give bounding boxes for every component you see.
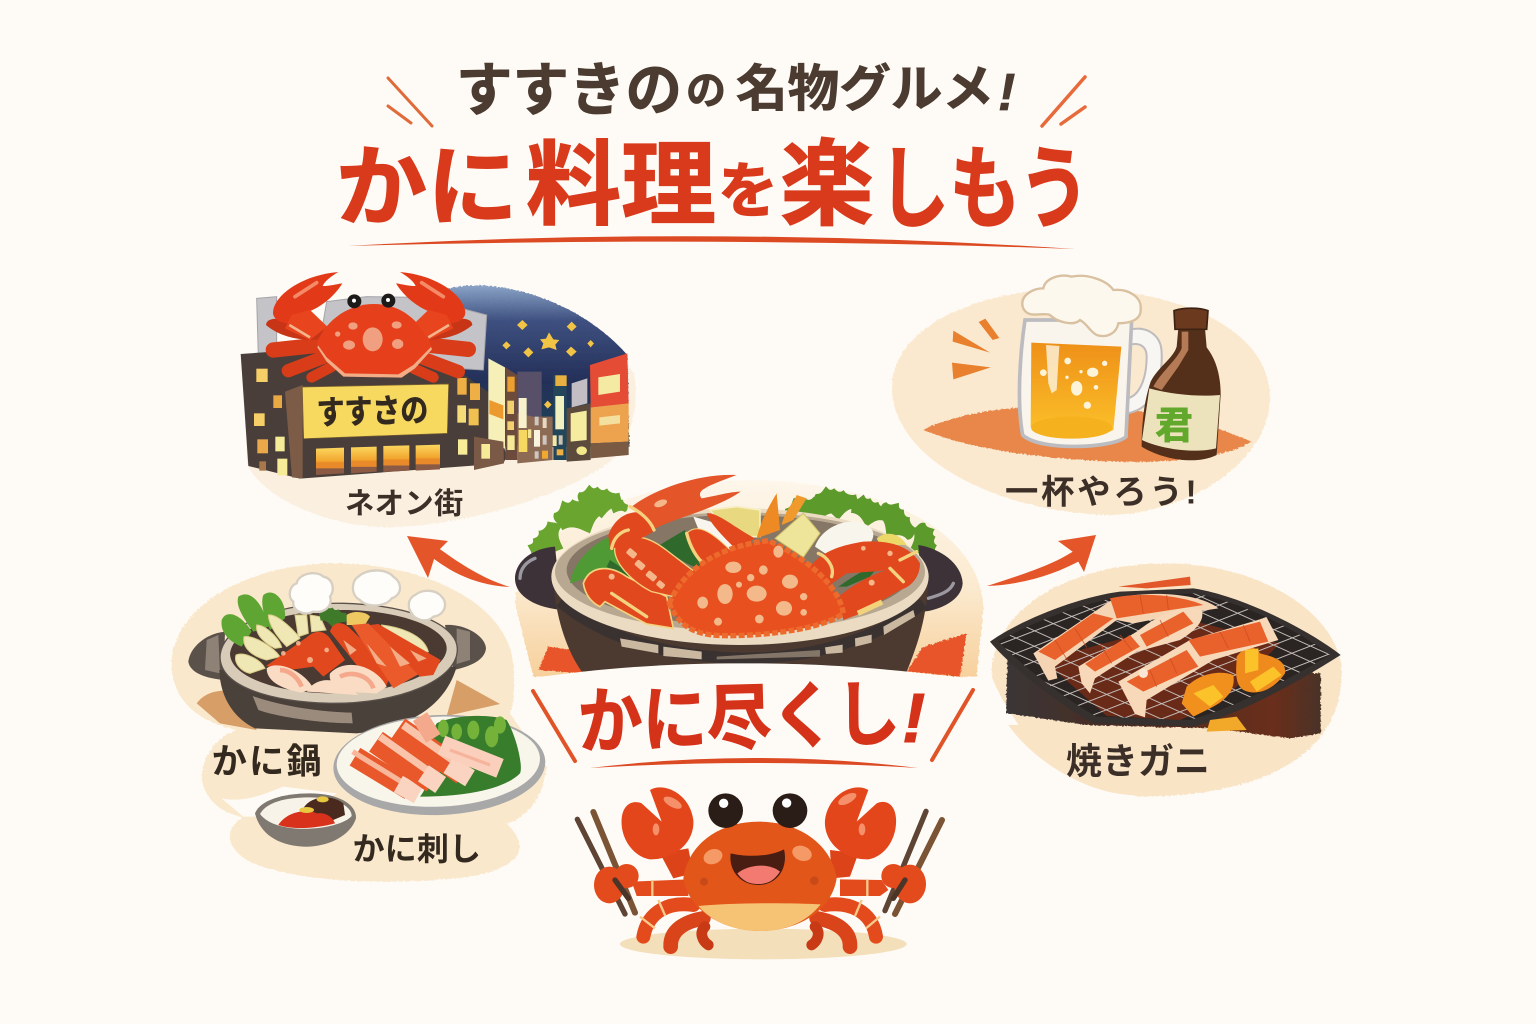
side wall: [285, 385, 303, 479]
dish inner: [260, 797, 352, 829]
mascot cheeks: [701, 843, 814, 867]
bottle body: [1142, 328, 1221, 460]
banner cut-out arc: [523, 663, 973, 687]
beer bubbles: [1040, 358, 1107, 409]
bottle: [1142, 308, 1221, 460]
pot rim: [551, 508, 929, 645]
crab spots: [335, 321, 403, 351]
sashimi plate: [332, 711, 547, 819]
night sky: [443, 285, 629, 447]
leg segment lines: [1055, 595, 1250, 687]
grill net frame: [990, 588, 1341, 727]
ground shadow: [620, 929, 907, 959]
heading: subtitle: の: [686, 69, 726, 113]
beer mug: [1019, 276, 1162, 446]
heading: subtitle: 名物グルメ: [736, 61, 994, 117]
crab shell edge: [317, 305, 432, 378]
arrow: to drinks: [987, 535, 1096, 586]
crab legs: [1033, 594, 1278, 717]
heading: main title: かに: [336, 138, 518, 237]
left middle leg: [615, 537, 697, 597]
bottle cap: [1174, 308, 1208, 329]
steam clouds: [290, 570, 445, 620]
claw highlights: [653, 790, 865, 835]
grill interior: [998, 593, 1330, 720]
banner underline: [590, 758, 918, 768]
upper arms: [660, 848, 858, 878]
label background: [1008, 725, 1307, 795]
sign text: すすさの: [316, 391, 429, 431]
panel: neon district: [241, 272, 636, 527]
banner text: かに尽くし: [577, 675, 901, 763]
heading: main title: 楽: [780, 132, 874, 237]
pot interior: [567, 515, 913, 625]
top crab leg: [1118, 577, 1191, 588]
hotpot: [188, 570, 486, 733]
yellow sign: [302, 384, 449, 439]
chopstick front segments: [615, 880, 905, 898]
inner leg: [687, 529, 730, 567]
pot shadow right: [447, 680, 500, 716]
sparkle marks: [952, 319, 999, 379]
pot dark band: [560, 602, 923, 658]
leg three: [1118, 617, 1278, 717]
chopsticks left: [577, 812, 635, 914]
crab sticks: [267, 665, 387, 695]
crab arm left: [266, 272, 342, 340]
crab shell: [317, 304, 431, 374]
main dark building: [241, 350, 507, 479]
pot band highlights: [620, 610, 915, 659]
pot handles: [515, 545, 963, 612]
grill base: [1006, 660, 1321, 738]
windows left: [254, 369, 480, 475]
white gaps: [222, 787, 337, 817]
heading: main title: [336, 132, 1090, 240]
central hero: crab hotpot: [515, 475, 983, 687]
panel: grilled crab: [990, 563, 1342, 797]
mascot belly: [698, 903, 821, 931]
title underline: [348, 236, 1075, 249]
panel background: [172, 563, 547, 882]
bottle label: [1142, 388, 1220, 451]
pot rim shadow: [555, 512, 925, 631]
heading: main title: しもう: [878, 140, 1090, 240]
arrow: to neon district: [407, 536, 510, 587]
left greens: [523, 482, 631, 569]
pot front band: [253, 696, 353, 723]
mascot body: [683, 822, 837, 931]
pot shadow left: [197, 691, 257, 730]
label: crab sashimi: かに刺し: [353, 831, 481, 867]
panel background wash: [247, 327, 636, 527]
crab legs in pot: [266, 623, 441, 688]
label: grilled crab: 焼きガニ: [1066, 740, 1210, 781]
crab legs: [583, 475, 920, 628]
right greens: [781, 484, 946, 567]
tongue: [737, 866, 780, 884]
vegetables in pot: [570, 493, 907, 603]
mascot crab: [577, 787, 942, 959]
crab eyes: [347, 294, 395, 308]
crab shell spots: [697, 546, 807, 626]
panel background: [992, 563, 1342, 797]
right upper leg: [810, 541, 920, 590]
plate rim: [332, 711, 547, 819]
shiso leaves: [420, 716, 521, 797]
leg spots: [609, 498, 893, 616]
greens: [319, 606, 347, 628]
pot interior: [230, 610, 447, 693]
panel: crab hotpot and sashimi: [172, 563, 547, 882]
table strokes: [538, 633, 967, 677]
red sauce: [278, 811, 335, 828]
eye stalks: [733, 820, 784, 833]
left accent lines: [388, 78, 432, 126]
pot handles: [188, 632, 225, 680]
vegetables: [221, 592, 285, 647]
right lower leg: [838, 568, 906, 620]
panel background: [892, 288, 1270, 515]
bottle shine: [1153, 332, 1188, 390]
beer foam: [1022, 276, 1141, 336]
coals: [1182, 647, 1285, 732]
left claw: [632, 475, 741, 530]
bottle label text: 君: [1155, 405, 1193, 447]
plate surface: [335, 713, 542, 810]
heading: subtitle: !: [998, 64, 1015, 122]
pot body: [219, 667, 457, 733]
leg two: [1078, 608, 1202, 693]
mascot dimples: [700, 876, 819, 886]
chopsticks right: [885, 811, 942, 914]
crab leg meat: [281, 640, 427, 667]
right big claw: [825, 787, 896, 859]
crab arm right: [396, 272, 472, 340]
pot rim: [220, 603, 457, 703]
left lower leg: [583, 569, 673, 628]
leaf highlights: [438, 716, 506, 747]
crab sashimi pieces: [353, 717, 500, 795]
crab on the billboard: [266, 272, 472, 378]
handle highlights: [520, 558, 953, 598]
dish body: [255, 793, 356, 847]
back buildings: [257, 297, 487, 370]
label: crab hotpot: かに鍋: [212, 742, 322, 781]
arms with side stripes: [632, 879, 888, 896]
shop windows: [316, 445, 440, 475]
mug handle: [1125, 329, 1162, 413]
leg joints: [612, 507, 917, 617]
dark sauce: [303, 797, 345, 820]
back legs: [643, 904, 876, 947]
pot body: [553, 580, 928, 672]
stars: [502, 320, 594, 409]
white tofu: [815, 522, 873, 557]
leg stripes: [640, 900, 880, 928]
leg one: [1033, 594, 1218, 681]
banner accent lines: [533, 690, 973, 761]
heading: subtitle: [456, 58, 1015, 123]
pincer hands: [594, 864, 926, 903]
crab legs: [273, 345, 468, 377]
hero background: [515, 480, 983, 677]
title block: [336, 58, 1090, 249]
glass highlight: [1046, 345, 1059, 393]
centre banner: [533, 675, 973, 768]
left claw arm: [608, 512, 655, 550]
embers: [1043, 620, 1280, 720]
panel: beer and sake: [892, 276, 1270, 515]
left big claw: [622, 787, 693, 859]
heading: main title: 料理: [526, 135, 716, 237]
mug glass: [1019, 320, 1132, 446]
sauce dish: [255, 793, 356, 847]
right buildings: [474, 353, 629, 470]
right accent lines: [1042, 77, 1085, 126]
heading: main title: を: [718, 158, 778, 225]
table shadow: [923, 407, 1252, 462]
grill grid: [998, 593, 1330, 720]
label: neon street: ネオン街: [345, 487, 463, 520]
dish condiment: [299, 796, 329, 813]
mouth: [730, 849, 785, 885]
label: drink: 一杯やろう!: [1005, 474, 1197, 511]
banner text: !: [902, 679, 925, 757]
beer bottom ellipse: [1031, 417, 1112, 439]
beer liquid: [1031, 343, 1121, 437]
heading: subtitle: すすきの: [456, 58, 682, 123]
eyes: [708, 793, 807, 828]
crab shell: [669, 541, 843, 636]
